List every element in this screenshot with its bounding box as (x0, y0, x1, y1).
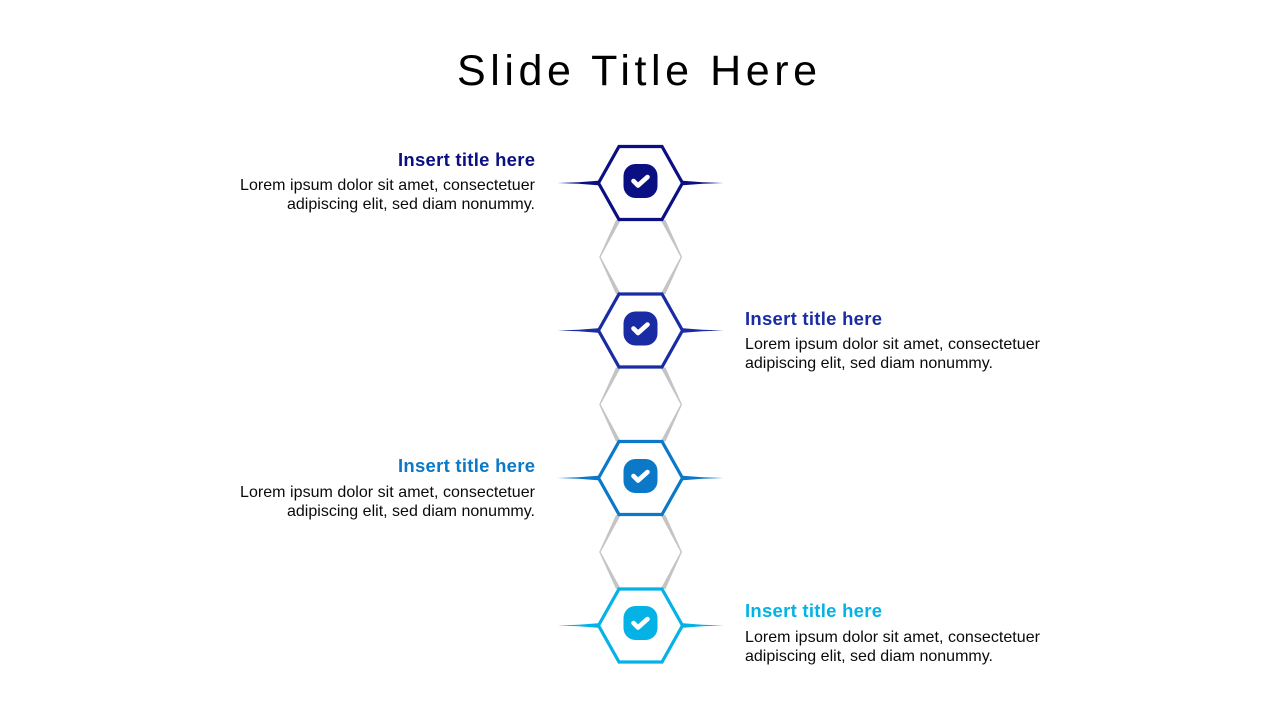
connector hexagon 1 (599, 220, 682, 294)
text block 2: Insert title here (745, 308, 882, 329)
text block 3 (240, 455, 536, 520)
title: Slide Title Here (457, 47, 817, 95)
text block 3: adipiscing elit, sed diam nonummy. (287, 503, 535, 520)
text block 3: Lorem ipsum dolor sit amet, consectetuer (240, 484, 536, 501)
text block 3: Insert title here (398, 455, 535, 476)
text block 4: Lorem ipsum dolor sit amet, consectetuer (745, 629, 1041, 646)
text block 4: adipiscing elit, sed diam nonummy. (745, 648, 993, 665)
text block 1: adipiscing elit, sed diam nonummy. (287, 196, 535, 213)
step 3 hexagon icon (558, 442, 724, 514)
step 4 hexagon icon (558, 589, 724, 662)
text block 4: Insert title here (745, 600, 882, 621)
step 2 hexagon icon (558, 294, 724, 367)
text block 1: Lorem ipsum dolor sit amet, consectetuer (240, 177, 536, 194)
text block 2: adipiscing elit, sed diam nonummy. (745, 355, 993, 372)
text block 2: Lorem ipsum dolor sit amet, consectetuer (745, 336, 1041, 353)
text block 1 (240, 149, 536, 213)
text block 1: Insert title here (398, 149, 535, 170)
connector hexagon 3 (599, 515, 682, 589)
text block 2 (745, 308, 1041, 372)
text block 4 (745, 600, 1041, 665)
step 1 hexagon icon (558, 146, 724, 220)
connector hexagon 2 (599, 368, 682, 442)
